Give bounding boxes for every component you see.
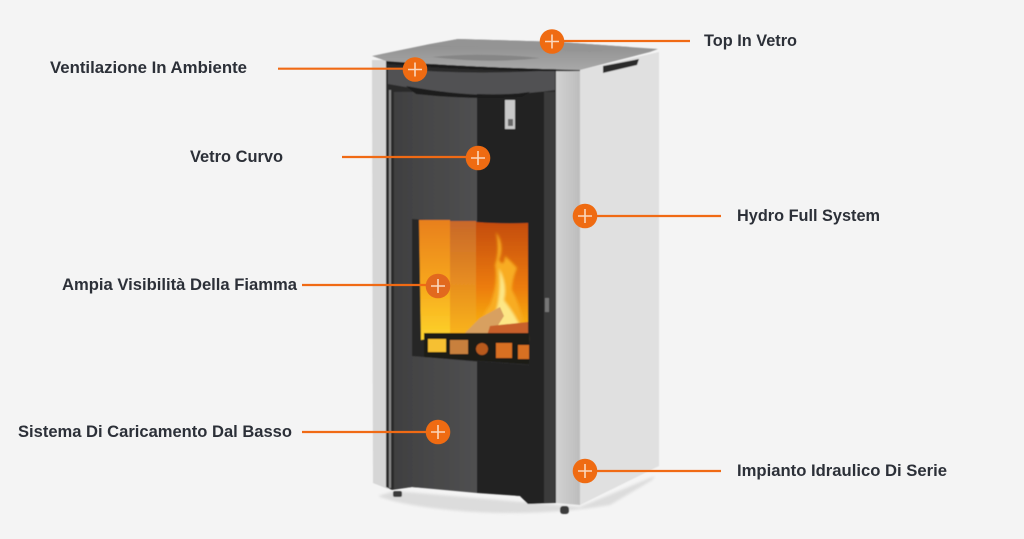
label: Sistema Di Caricamento Dal Basso <box>18 420 450 444</box>
right side panel <box>580 52 659 505</box>
stove illustration <box>372 39 659 514</box>
label: Vetro Curvo <box>190 146 490 170</box>
top slab <box>372 39 658 70</box>
grate <box>424 333 529 364</box>
vent slot <box>406 86 530 98</box>
label: Hydro Full System <box>573 204 880 228</box>
label: Ampia Visibilità Della Fiamma: Ampia Visibilità Della Fiamma <box>62 275 298 294</box>
top ventilation band <box>388 68 555 94</box>
door edge light strip <box>389 90 391 488</box>
floor shadow <box>378 476 655 513</box>
left side panel <box>372 60 388 489</box>
door right strip <box>544 92 555 503</box>
slab front edge <box>386 61 580 71</box>
label: Ventilazione In Ambiente <box>50 57 427 82</box>
foot right <box>560 506 569 514</box>
label: Ventilazione In Ambiente: Ventilazione In Ambiente <box>50 58 247 77</box>
label: Top In Vetro <box>540 29 797 54</box>
slab raised plate <box>426 39 630 52</box>
label: Vetro Curvo: Vetro Curvo <box>190 147 283 166</box>
fire middle wall <box>450 221 476 340</box>
fire back wall <box>476 222 528 340</box>
fire window <box>412 219 529 366</box>
door black glass <box>477 92 544 504</box>
foot left <box>393 491 402 497</box>
flame core <box>490 268 522 330</box>
front corner panel <box>556 70 580 505</box>
window frame <box>412 219 529 366</box>
handle label icon <box>508 119 513 126</box>
label: Impianto Idraulico Di Serie <box>573 459 947 483</box>
grate openings <box>428 339 446 352</box>
logs <box>462 307 528 342</box>
label: Sistema Di Caricamento Dal Basso: Sistema Di Caricamento Dal Basso <box>18 422 292 441</box>
rear vent <box>603 59 639 73</box>
fire left wall <box>419 220 450 340</box>
label: Hydro Full System: Hydro Full System <box>737 206 880 225</box>
label: Ampia Visibilità Della Fiamma <box>62 274 450 298</box>
door <box>386 64 556 504</box>
label: Impianto Idraulico Di Serie: Impianto Idraulico Di Serie <box>737 461 947 480</box>
ember logs <box>485 322 528 342</box>
door hinge <box>545 298 549 312</box>
flame <box>480 232 528 340</box>
slab hob detail <box>432 55 540 61</box>
door grey glass <box>394 92 477 493</box>
label: Top In Vetro: Top In Vetro <box>704 31 797 50</box>
handle label <box>505 100 515 129</box>
